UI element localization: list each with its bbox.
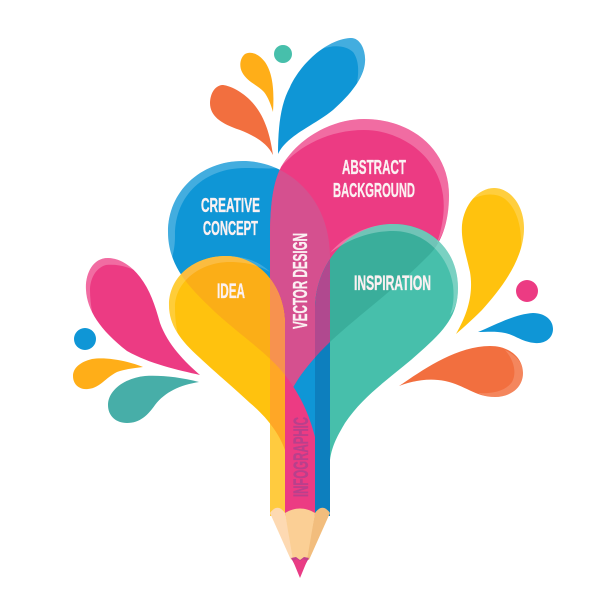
pencil wood: middle facet: [285, 508, 315, 560]
pencil wood: left facet: [270, 508, 294, 560]
highlight: blue drop: [168, 161, 280, 258]
pencil body: pink stripe: [285, 380, 315, 516]
pencil wood: right facet: [306, 508, 330, 560]
text: concept: CONCEPT: [203, 218, 258, 240]
drop: amber top: [240, 53, 273, 112]
circle: teal: [274, 45, 292, 63]
highlight: yellow drop: [169, 256, 270, 335]
teal drop: inspiration: [315, 224, 458, 460]
pencil lead base: [291, 557, 309, 567]
yellow drop: idea: [169, 256, 285, 450]
drop: blue right: [478, 313, 553, 343]
circle: pink: [516, 280, 538, 302]
label: idea: IDEA: [217, 280, 245, 303]
pencil body: yellow stripe: [270, 340, 285, 516]
overlap: pink and teal: [315, 224, 439, 342]
overlap: yellow, blue and pencil stripe: [270, 279, 285, 375]
text: creative: CREATIVE: [201, 195, 260, 217]
drop: amber left: [73, 358, 143, 389]
highlight: orange right drop: [478, 350, 523, 397]
text: background: BACKGROUND: [333, 180, 415, 202]
highlight: pink drop: [281, 119, 449, 243]
drop: orange right: [399, 346, 523, 397]
pencil: [270, 340, 330, 578]
pencil body: blue stripe: [315, 340, 330, 516]
text: abstract: ABSTRACT: [342, 157, 406, 179]
drop: pink left: [86, 258, 200, 375]
pencil lead tip: [293, 559, 307, 578]
drop: blue top: [278, 38, 365, 154]
overlap: blue and pink: [270, 170, 330, 386]
circle: blue: [74, 328, 96, 350]
label: vector design: VECTOR DESIGN: [290, 233, 312, 329]
left splash: [73, 258, 200, 423]
label: abstract background: [333, 157, 415, 202]
drop: yellow right: [456, 188, 524, 334]
drop: orange top: [210, 85, 273, 155]
main drops group: [168, 119, 458, 460]
highlight: yellow right drop: [470, 188, 524, 248]
label: creative concept: [201, 195, 260, 240]
label: inspiration: INSPIRATION: [354, 272, 431, 295]
pink drop: abstract background: [270, 119, 449, 420]
right splash: [399, 188, 553, 397]
highlight: teal drop: [330, 224, 458, 315]
highlight: blue top drop: [322, 38, 365, 83]
top splash: [210, 38, 365, 155]
overlap: blue, pink and teal: [315, 260, 330, 358]
label: infographic: INFOGRAPHIC: [290, 417, 313, 497]
highlight: pink left drop: [86, 258, 136, 312]
blue drop: creative concept: [168, 161, 330, 460]
overlap: blue and teal: [315, 259, 330, 460]
overlap: yellow and blue: [181, 256, 285, 358]
drop: teal left: [108, 376, 199, 423]
overlap: yellow and pencil stripe: [270, 278, 285, 450]
